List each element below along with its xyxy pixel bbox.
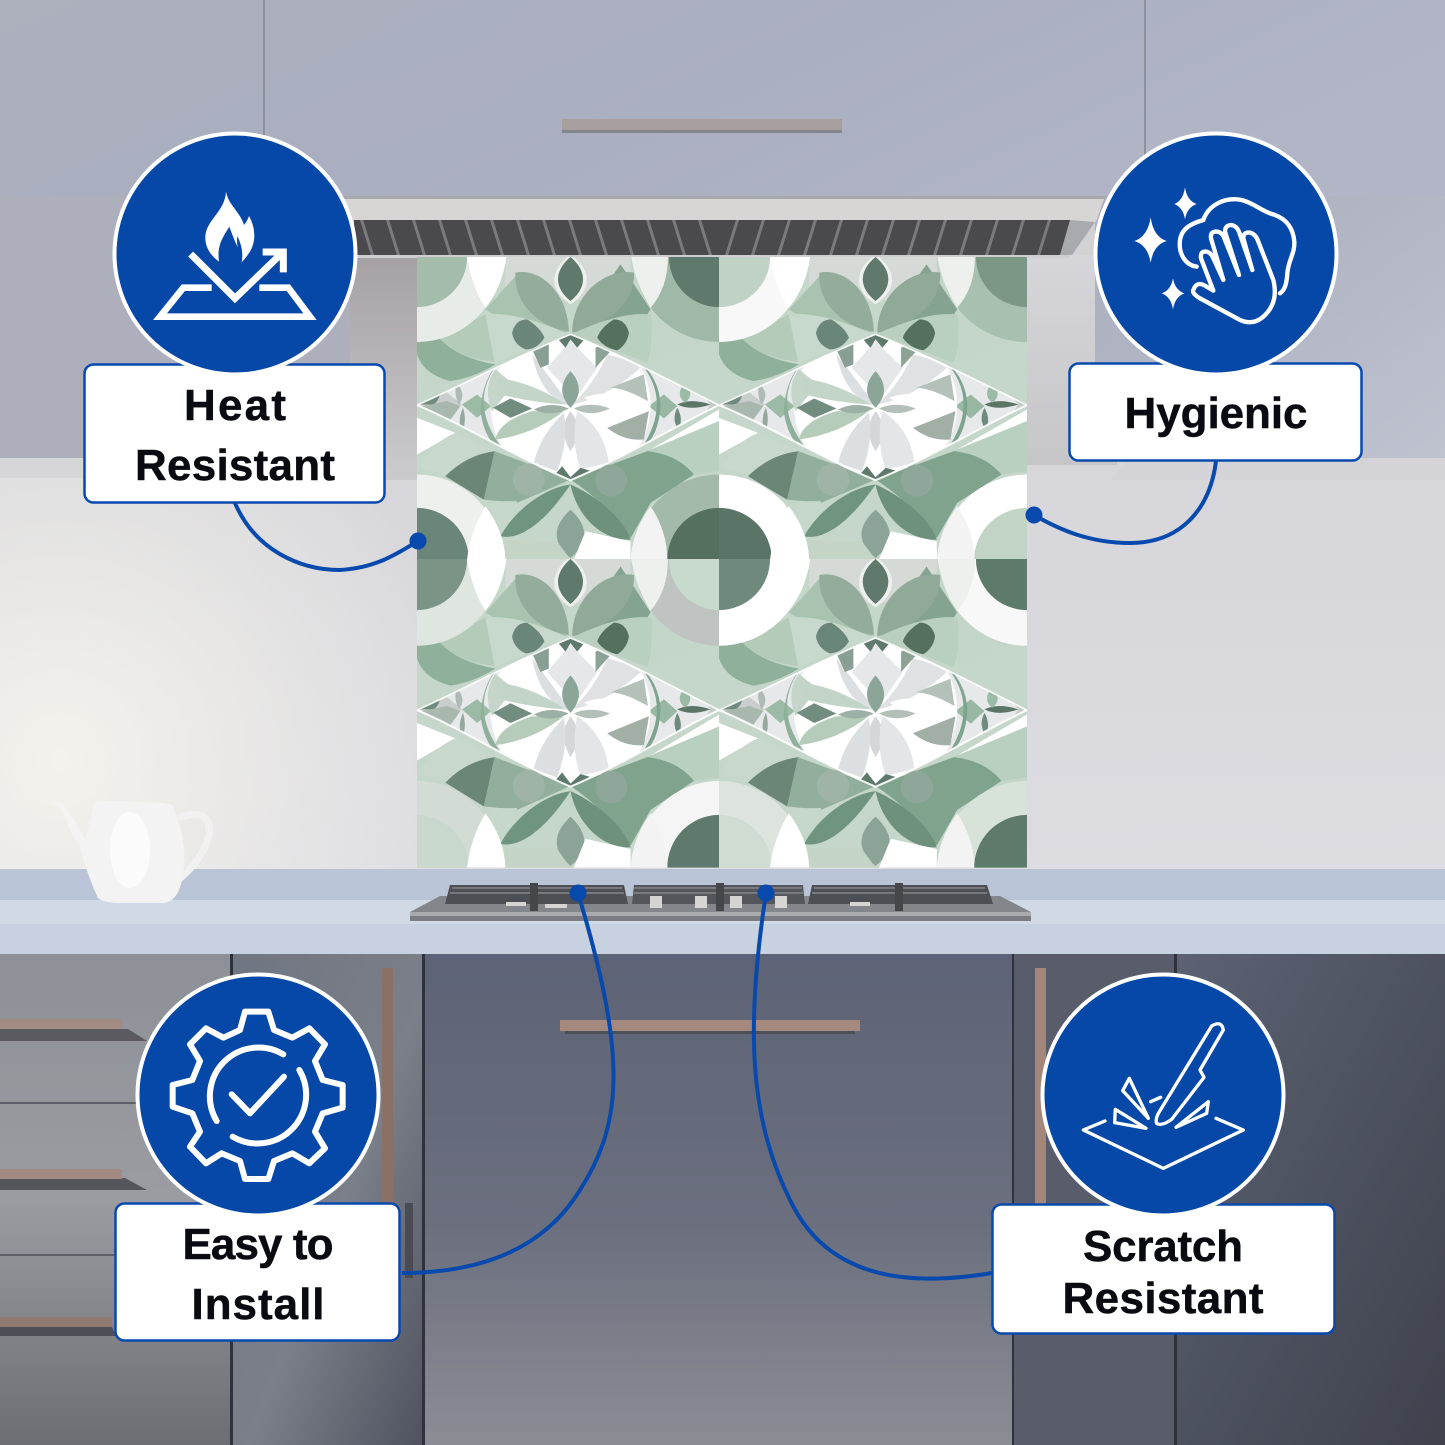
connector: easy to install to cooktop	[402, 884, 614, 1273]
icon: flame over surface with arrow	[160, 192, 310, 317]
label text	[135, 381, 335, 490]
label text	[182, 1220, 334, 1329]
tile: top right	[719, 257, 1027, 559]
badge circle	[1042, 974, 1284, 1216]
icon: hand wiping with sparkles	[1134, 187, 1294, 322]
label box	[116, 1204, 400, 1340]
label text: Heat	[184, 381, 286, 430]
lower cabinets	[0, 954, 1445, 1445]
cabinet handle	[562, 119, 842, 133]
range hood	[342, 196, 1105, 258]
connector: heat resistant to panel	[235, 503, 426, 570]
cabinet handles	[0, 968, 1046, 1336]
connector: scratch resistant to cooktop	[754, 884, 992, 1279]
callout: easy to install	[116, 974, 400, 1340]
tile: bottom left	[417, 559, 719, 868]
tile: top left	[417, 257, 719, 559]
icon: knife scratching surface	[1083, 1024, 1243, 1168]
patterned splashback panel	[332, 172, 1114, 954]
label box	[992, 1204, 1334, 1334]
icon: gear with check mark	[173, 1012, 343, 1179]
callout: hygienic	[1070, 134, 1362, 460]
label text	[1062, 1222, 1264, 1323]
cooktop	[410, 883, 1031, 921]
label box	[1070, 364, 1362, 460]
callout: scratch resistant	[992, 974, 1334, 1334]
badge circle	[138, 974, 378, 1216]
badge circle	[114, 134, 356, 374]
teapot	[50, 801, 209, 903]
badge circle	[1096, 134, 1336, 374]
tile: bottom right	[719, 559, 1027, 868]
countertop	[0, 869, 1445, 954]
callout: heat resistant	[84, 134, 384, 502]
label text: Easy to	[182, 1220, 334, 1269]
label text: Resistant	[1062, 1274, 1264, 1323]
label text: Hygienic	[1124, 389, 1308, 438]
connector: hygienic to panel	[1026, 461, 1216, 543]
label text: Resistant	[135, 441, 335, 490]
label text: Scratch	[1083, 1222, 1243, 1271]
upper cabinets	[0, 0, 1445, 480]
background: kitchen wall	[0, 0, 1445, 900]
label text: Install	[192, 1280, 324, 1329]
label box	[84, 364, 384, 502]
